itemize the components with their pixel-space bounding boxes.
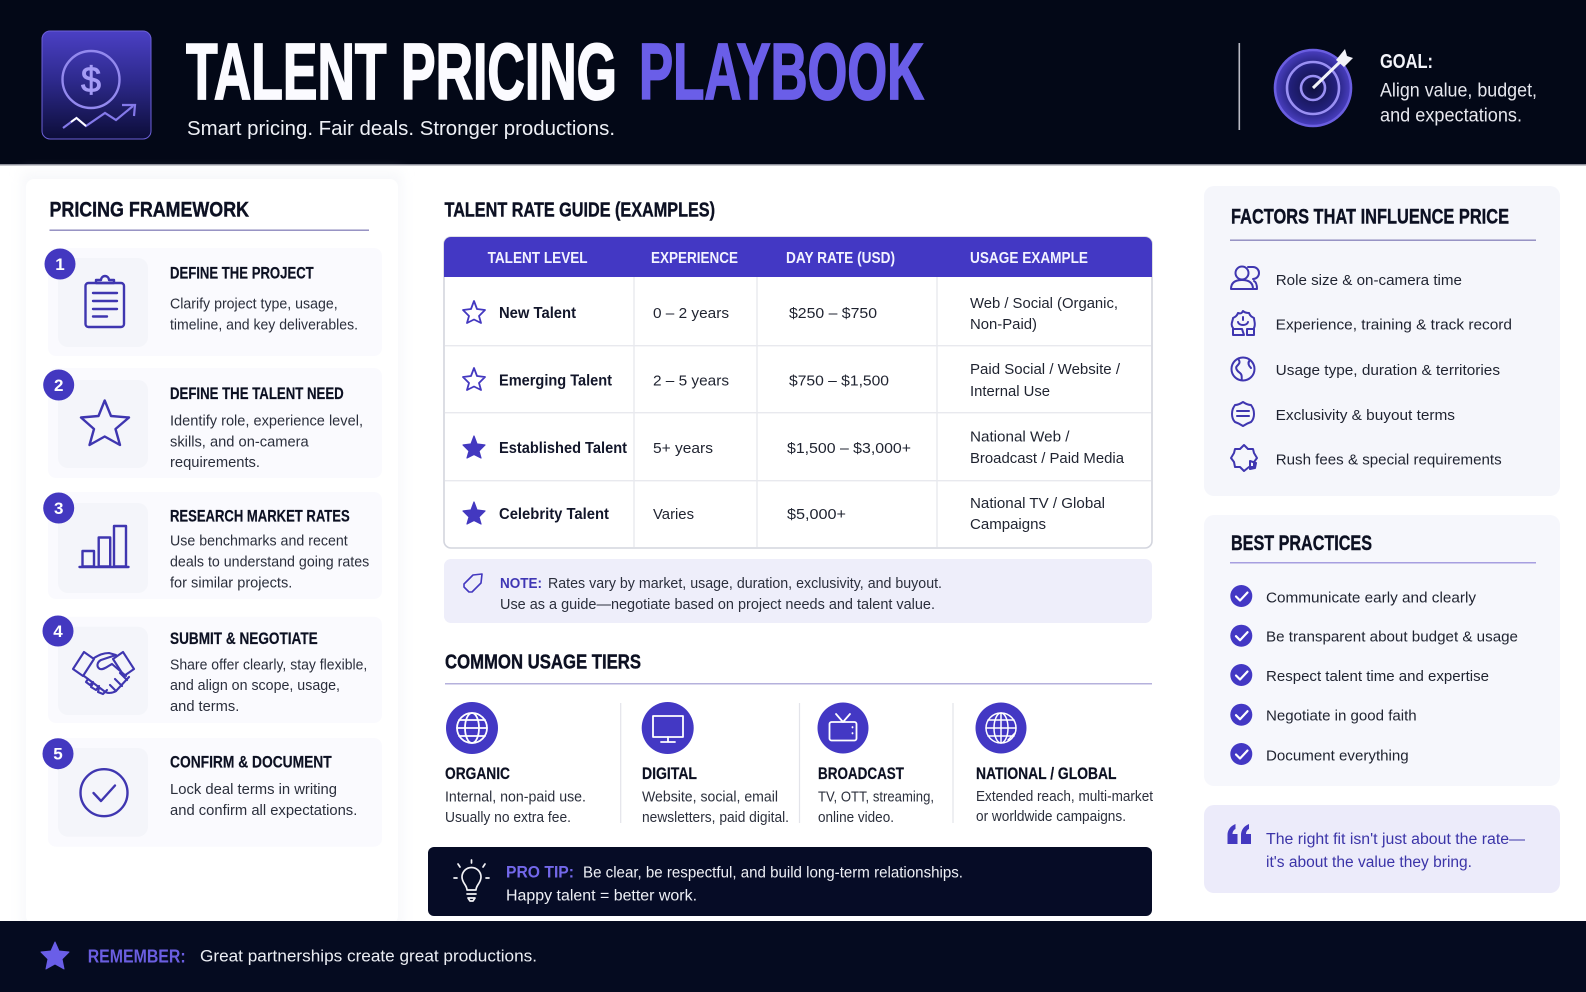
row: established talent: 5+ years	[653, 440, 713, 457]
row: emerging talent	[463, 361, 1121, 400]
tier: national global	[976, 702, 1153, 825]
row: celebrity talent: Varies	[653, 506, 694, 523]
step 4: submit and negotiate: 4	[53, 622, 63, 641]
step 2: define the talent need: Identify role, experience level,	[170, 414, 363, 430]
factor: role size: Role size & on-camera time	[1276, 272, 1462, 289]
step 5: confirm and document	[42, 738, 382, 847]
panel: best practices	[1204, 515, 1560, 786]
footer band: REMEMBER:	[88, 946, 186, 967]
step 2: define the talent need: 2	[54, 376, 63, 395]
step 4: submit and negotiate: Share offer clearly, stay flexible,	[170, 657, 367, 673]
icon: star	[81, 400, 129, 445]
practice 2	[1230, 625, 1518, 647]
footer band	[0, 921, 1586, 992]
quote callout: it's about the value they bring.	[1266, 854, 1472, 871]
row: new talent: $250 – $750	[789, 305, 877, 322]
factor: rush fees: Rush fees & special requirements	[1276, 451, 1502, 468]
step 4: submit and negotiate: SUBMIT & NEGOTIATE	[170, 630, 318, 648]
row: celebrity talent	[463, 495, 1105, 533]
row: celebrity talent: Celebrity Talent	[499, 506, 609, 523]
table header row	[444, 237, 1152, 277]
goal text: GOAL:	[1380, 50, 1433, 73]
tier: organic	[445, 702, 586, 826]
goal text: Align value, budget,	[1380, 81, 1537, 102]
panel: pricing framework	[22, 172, 402, 932]
factor: exclusivity	[1232, 402, 1455, 426]
icon: quote marks	[1228, 824, 1251, 844]
icon: handshake	[73, 652, 134, 694]
heading: pricing framework: PRICING FRAMEWORK	[50, 198, 249, 222]
tier: broadcast: online video.	[818, 810, 894, 826]
step 3: research market rates	[43, 492, 382, 599]
factor: role size	[1231, 266, 1462, 289]
row: celebrity talent: $5,000+	[787, 506, 846, 523]
table header row: TALENT LEVEL	[488, 250, 588, 267]
tier: broadcast: TV, OTT, streaming,	[818, 790, 934, 806]
goal text	[1380, 50, 1537, 127]
table header row: USAGE EXAMPLE	[970, 250, 1088, 267]
tier: digital: DIGITAL	[642, 765, 697, 783]
step 3: research market rates: for similar projects.	[170, 575, 292, 591]
step 3: research market rates: deals to understand going rates	[170, 555, 369, 571]
row: emerging talent: Internal Use	[970, 383, 1050, 400]
tier: digital: Website, social, email	[642, 790, 778, 806]
note callout: Use as a guide—negotiate based on project needs and talent value.	[500, 597, 935, 613]
row: celebrity talent: Campaigns	[970, 516, 1046, 533]
quote callout	[1204, 805, 1560, 893]
tier: national global: or worldwide campaigns.	[976, 809, 1126, 825]
heading: talent rate guide: TALENT RATE GUIDE (EXAMPLES)	[444, 200, 715, 222]
step 1: define the project: Clarify project type, usage,	[170, 296, 338, 312]
tier: national global: Extended reach, multi-market	[976, 789, 1153, 805]
pro tip banner: Happy talent = better work.	[506, 888, 697, 905]
factor: rush fees	[1231, 445, 1502, 471]
practice 5: Document everything	[1266, 748, 1409, 765]
row: new talent: 0 – 2 years	[653, 305, 729, 322]
title: TALENT PRICING	[186, 27, 617, 116]
row: established talent: Broadcast / Paid Media	[970, 450, 1125, 467]
icon: dollar coin with rising chart: $	[81, 59, 101, 100]
tier: digital	[642, 702, 789, 826]
practice 3	[1230, 664, 1489, 686]
step 1: define the project	[44, 248, 382, 356]
step 4: submit and negotiate: and terms.	[170, 699, 239, 715]
pro tip banner: PRO TIP:	[506, 864, 574, 882]
row: established talent	[463, 429, 1125, 467]
factor: usage type	[1232, 358, 1500, 380]
goal text: and expectations.	[1380, 106, 1522, 127]
tier: digital: newsletters, paid digital.	[642, 810, 789, 826]
practice 1	[1230, 585, 1476, 607]
quote callout: The right fit isn't just about the rate—	[1266, 831, 1526, 848]
usage tiers	[445, 702, 1153, 826]
table header row: DAY RATE (USD)	[786, 250, 895, 267]
practice 2: Be transparent about budget & usage	[1266, 629, 1518, 646]
step 4: submit and negotiate: and align on scope, usage,	[170, 678, 340, 694]
step 4: submit and negotiate	[42, 616, 382, 723]
step 2: define the talent need: skills, and on-camera	[170, 435, 310, 451]
note callout	[444, 559, 1152, 623]
factor: experience: Experience, training & track record	[1276, 316, 1512, 333]
heading: best practices: BEST PRACTICES	[1231, 531, 1372, 555]
icon: tag	[464, 574, 482, 592]
practice 4: Negotiate in good faith	[1266, 708, 1417, 725]
table: talent rates	[444, 237, 1152, 548]
step 1: define the project: timeline, and key deliverables.	[170, 317, 358, 333]
note callout: NOTE:	[500, 576, 542, 592]
step 5: confirm and document: and confirm all expectations.	[170, 803, 357, 819]
footer band: Great partnerships create great productions.	[200, 948, 537, 966]
step 5: confirm and document: CONFIRM & DOCUMENT	[170, 753, 332, 771]
icon: dollar coin with rising chart	[42, 31, 151, 139]
practice 4	[1230, 704, 1417, 726]
icon: star	[41, 942, 69, 969]
step 2: define the talent need	[43, 368, 382, 478]
heading: factors: FACTORS THAT INFLUENCE PRICE	[1231, 204, 1509, 228]
heading: common usage tiers: COMMON USAGE TIERS	[445, 651, 641, 673]
step 5: confirm and document: Lock deal terms in writing	[170, 782, 337, 798]
step 3: research market rates: 3	[54, 499, 63, 518]
tier: organic: Usually no extra fee.	[445, 810, 571, 826]
subtitle: Smart pricing. Fair deals. Stronger productions.	[187, 118, 615, 140]
step 1: define the project: 1	[55, 255, 65, 274]
tier: broadcast: BROADCAST	[818, 765, 904, 783]
step 3: research market rates: RESEARCH MARKET RATES	[170, 508, 350, 526]
row: new talent: Web / Social (Organic,	[970, 295, 1118, 312]
row: celebrity talent: National TV / Global	[970, 495, 1105, 512]
row: emerging talent: Emerging Talent	[499, 373, 612, 390]
tier: organic: Internal, non-paid use.	[445, 790, 586, 806]
icon: clipboard	[86, 276, 124, 327]
divider	[1238, 43, 1240, 130]
tier: national global: NATIONAL / GLOBAL	[976, 765, 1116, 783]
panel: factors that influence price	[1204, 186, 1560, 496]
step 1: define the project: DEFINE THE PROJECT	[170, 264, 314, 282]
practice 5	[1230, 743, 1409, 765]
icon: bar chart	[80, 526, 128, 567]
icon: check circle	[80, 769, 128, 816]
row: new talent: Non-Paid)	[970, 316, 1037, 333]
step 5: confirm and document: 5	[53, 745, 63, 764]
tier: broadcast	[818, 702, 934, 826]
factor: exclusivity: Exclusivity & buyout terms	[1276, 407, 1455, 424]
table header row: EXPERIENCE	[651, 250, 738, 267]
pro tip banner	[428, 847, 1152, 916]
row: new talent	[463, 295, 1118, 333]
factor: experience	[1232, 311, 1512, 335]
row: established talent: $1,500 – $3,000+	[787, 440, 911, 457]
step 2: define the talent need: requirements.	[170, 455, 260, 471]
step 3: research market rates: Use benchmarks and recent	[170, 534, 348, 550]
row: emerging talent: 2 – 5 years	[653, 373, 729, 390]
icon: target with arrow	[1275, 49, 1353, 126]
row: established talent: Established Talent	[499, 440, 627, 457]
practice 3: Respect talent time and expertise	[1266, 668, 1489, 685]
note callout: Rates vary by market, usage, duration, exclusivity, and buyout.	[548, 576, 942, 592]
icon: lightbulb	[454, 860, 489, 901]
header band	[0, 0, 1586, 166]
step 2: define the talent need: DEFINE THE TALENT NEED	[170, 385, 344, 403]
tier: organic: ORGANIC	[445, 765, 510, 783]
row: emerging talent: Paid Social / Website /	[970, 361, 1121, 378]
row: new talent: New Talent	[499, 305, 576, 322]
pro tip banner: Be clear, be respectful, and build long-term relationships.	[583, 864, 963, 881]
practice 1: Communicate early and clearly	[1266, 589, 1476, 606]
title: PLAYBOOK	[639, 27, 924, 116]
row: emerging talent: $750 – $1,500	[789, 373, 889, 390]
factor: usage type: Usage type, duration & territories	[1276, 362, 1500, 379]
row: established talent: National Web /	[970, 429, 1070, 446]
